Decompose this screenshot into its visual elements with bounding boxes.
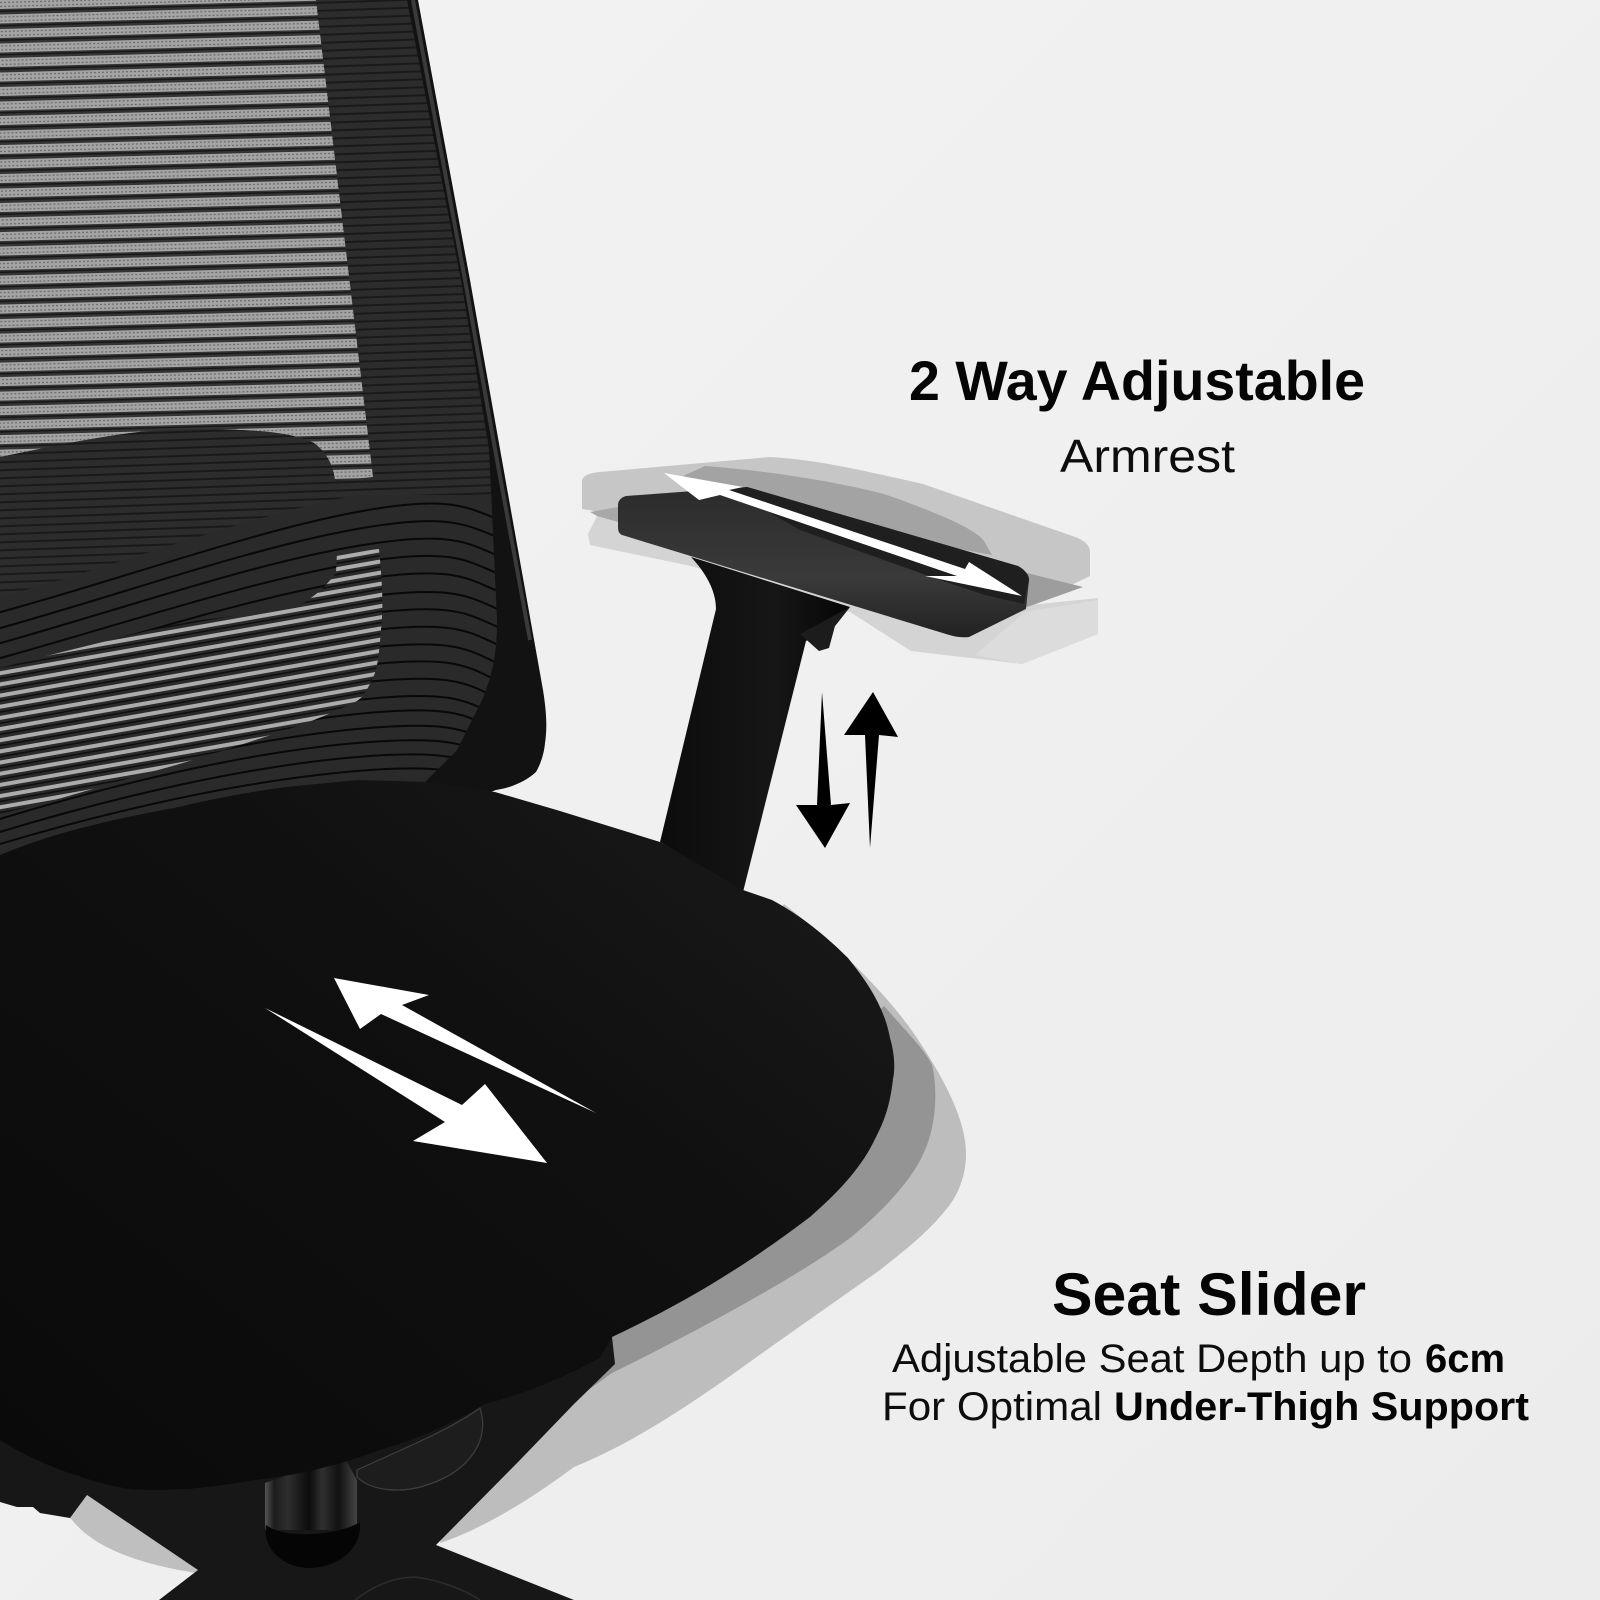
ghost armrest lower position: [588, 516, 1098, 664]
seat slider heading: Seat Slider: [1052, 1261, 1366, 1328]
seat pad surface: [0, 780, 894, 1490]
mesh lower curved stripes: [0, 495, 510, 880]
base and mechanism: [0, 1337, 615, 1600]
backrest shell: [0, 0, 546, 900]
seat cushion: [0, 780, 894, 1600]
column dark collar: [266, 1522, 360, 1568]
arrow: up: [844, 692, 898, 848]
seat slider description: For Optimal: [882, 1385, 1102, 1429]
seat slider description: 6cm: [1425, 1337, 1505, 1381]
armrest: [582, 457, 1098, 892]
mesh light upper area: [0, 0, 373, 481]
mesh panel: [0, 0, 497, 870]
armrest pad top face: [730, 487, 1029, 604]
armrest sliding arrow: [664, 473, 1022, 596]
arrow: seat back: [334, 978, 596, 1113]
armrest height arrows: [796, 692, 898, 848]
seat depth arrows: [265, 978, 596, 1163]
armrest heading: 2 Way Adjustable: [909, 349, 1365, 412]
ghost overlap right: [1015, 570, 1083, 610]
base pocket outline: [355, 1577, 480, 1600]
ghost lower highlight: [975, 600, 1098, 664]
mesh light lower area: [0, 549, 382, 814]
seat slider shadow: outer ghost seat: [440, 904, 966, 1543]
seat slider description: [882, 1337, 1529, 1429]
lumbar support pad: [0, 429, 336, 600]
armrest pad: [618, 487, 1029, 637]
transparent knob: [357, 1408, 483, 1490]
seat slider description: Under-Thigh Support: [1114, 1385, 1529, 1429]
seat slider description: Adjustable Seat Depth up to: [892, 1337, 1412, 1381]
armrest lever: [800, 607, 850, 651]
gas lift column: [265, 1455, 357, 1530]
ghost overlap left: [590, 507, 618, 522]
ghost overlap shading: [683, 466, 992, 555]
backrest: [0, 0, 546, 900]
backrest frame edge highlight: [413, 0, 530, 640]
arrow: down: [796, 692, 850, 848]
arrow: seat forward: [265, 1008, 547, 1163]
rear floor shadow: [70, 1495, 210, 1575]
seat slider shadow: inner ghost seat: [560, 1006, 935, 1391]
ghost armrest upper position: [582, 457, 1090, 605]
armrest subheading: Armrest: [1060, 430, 1235, 482]
armrest post: [660, 557, 850, 892]
